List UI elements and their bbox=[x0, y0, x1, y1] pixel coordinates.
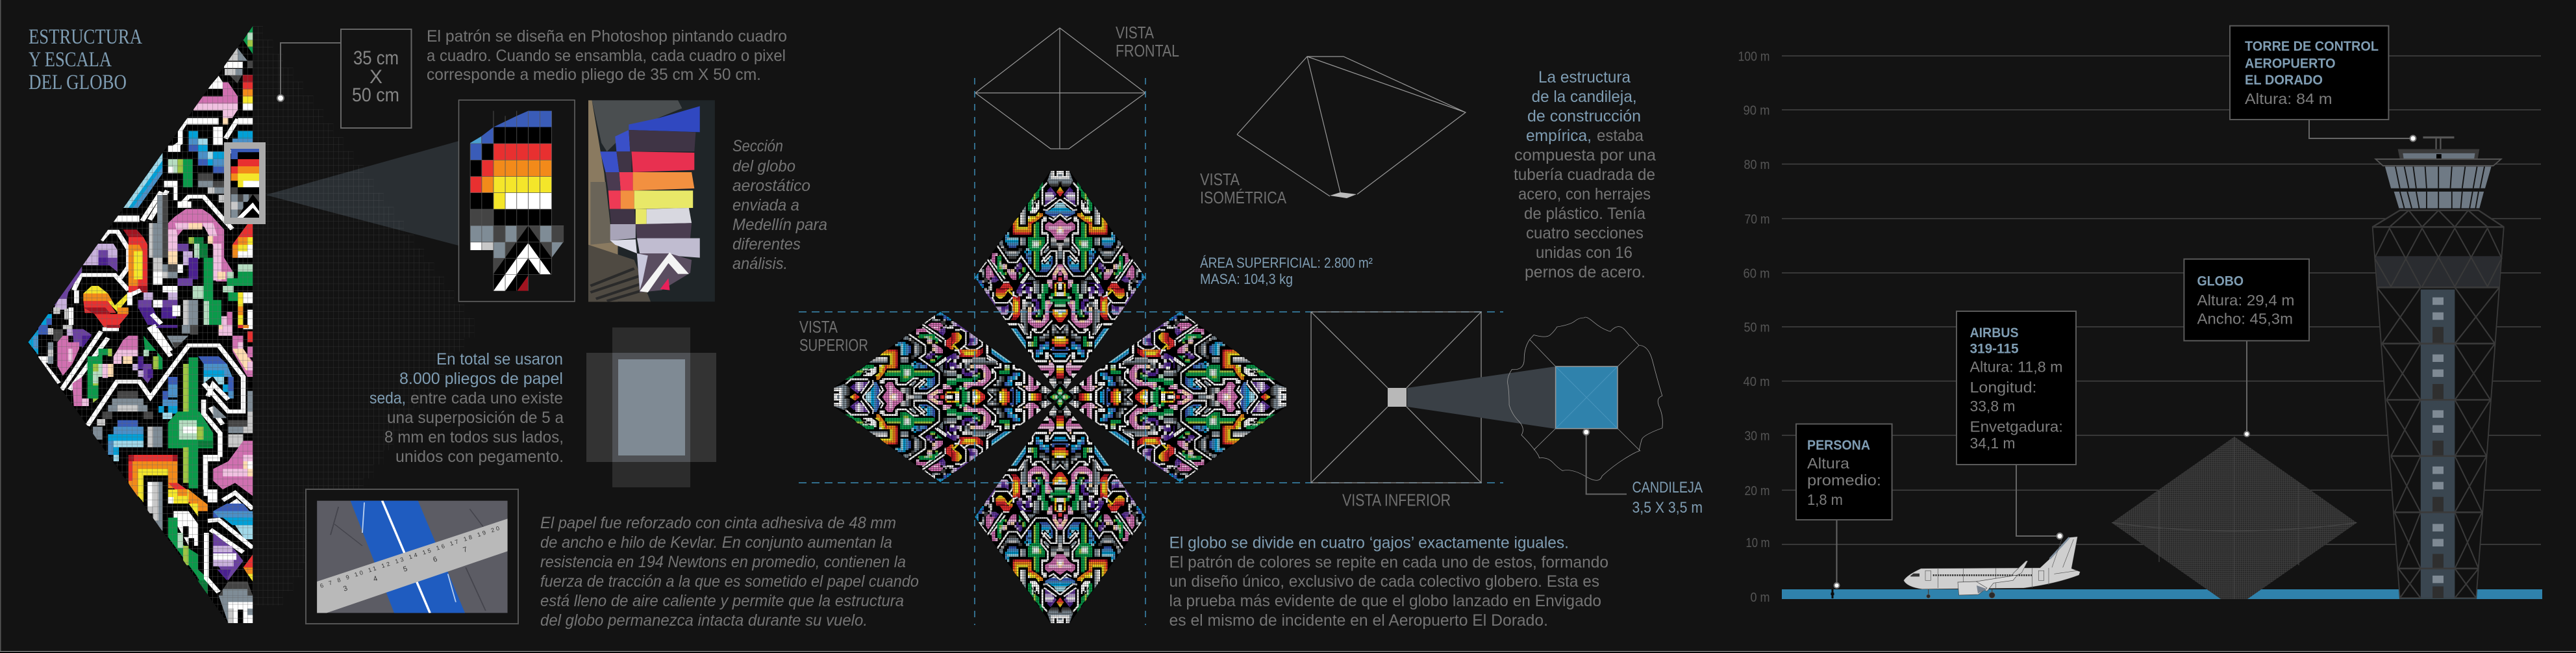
text: tape reinforcement bbox=[540, 514, 919, 630]
label: vista superior: SUPERIOR bbox=[799, 335, 868, 355]
candileja detail bbox=[1508, 317, 1662, 480]
airbus connector bbox=[2016, 465, 2062, 539]
box: airbus: Envetgadura: bbox=[1970, 418, 2063, 435]
text: candileja structure: unidas con 16 bbox=[1536, 244, 1632, 262]
box: torre de control: TORRE DE CONTROL bbox=[2245, 39, 2379, 54]
gore: left bbox=[833, 311, 1060, 483]
photo panel: tape and ruler: 3 4 5 6 7 bbox=[342, 546, 468, 593]
scale axis labels bbox=[1738, 50, 1770, 605]
title bbox=[29, 25, 142, 94]
text: tape reinforcement: está lleno de aire caliente y permite que la estructura bbox=[540, 592, 904, 610]
gore: top bbox=[974, 170, 1146, 398]
text: 8.000 sheets: 8.000 pliegos de papel bbox=[399, 370, 563, 388]
half gore mosaic, large bbox=[26, 25, 259, 626]
caption: section sent to Medellin: Medellín para bbox=[732, 216, 827, 234]
text: 8.000 sheets bbox=[369, 350, 564, 466]
text: 8.000 sheets: unidos con pegamento. bbox=[395, 448, 564, 466]
four gores top view bbox=[833, 170, 1287, 624]
diagram: paper overlap bbox=[586, 327, 716, 487]
text: 8.000 sheets: seda, bbox=[369, 389, 406, 407]
box: airbus bbox=[1957, 311, 2076, 465]
scale axis labels: 60 m bbox=[1743, 266, 1770, 281]
caption: section sent to Medellin: del globo bbox=[732, 157, 795, 175]
box: globo: GLOBO bbox=[2197, 274, 2244, 289]
caption: section sent to Medellin: enviada a bbox=[732, 196, 799, 214]
pixel grid shadow of half gore bbox=[253, 26, 474, 606]
box: airbus: Altura: 11,8 m bbox=[1970, 358, 2062, 375]
label: vista superior bbox=[799, 317, 868, 355]
stats: area and mass bbox=[1200, 255, 1373, 287]
box: torre de control bbox=[2230, 26, 2388, 120]
title: Y ESCALA bbox=[29, 48, 112, 71]
candileja connector bbox=[1583, 429, 1627, 494]
text: four equal gores: la prueba más evidente de que el globo lanzado en Envigado bbox=[1169, 592, 1601, 610]
text: 8.000 sheets: una superposición de 5 a bbox=[387, 409, 564, 427]
scale axis labels: 100 m bbox=[1738, 50, 1770, 64]
size box 35 x 50 cm bbox=[341, 29, 412, 128]
stats: area and mass: MASA: 104,3 kg bbox=[1200, 271, 1293, 287]
box: airbus: 34,1 m bbox=[1970, 435, 2016, 452]
text: 8.000 sheets: En total se usaron bbox=[436, 350, 563, 368]
text: tape reinforcement: del globo permanezca intacta durante su vuelo. bbox=[540, 611, 868, 630]
box: persona: PERSONA bbox=[1807, 438, 1870, 453]
person silhouette bbox=[1831, 589, 1834, 598]
text: candileja structure: de la candileja, bbox=[1532, 88, 1637, 106]
size box 35 x 50 cm: 35 cm bbox=[353, 47, 399, 69]
label: vista frontal: FRONTAL bbox=[1116, 41, 1179, 60]
caption: section sent to Medellin: aerostático bbox=[732, 177, 810, 195]
isometric view wireframe bbox=[1237, 57, 1466, 198]
text: candileja structure: tubería cuadrada de bbox=[1514, 166, 1655, 184]
box: airbus: 33,8 m bbox=[1970, 398, 2016, 415]
caption: section sent to Medellin bbox=[732, 137, 827, 273]
text: tape reinforcement: El papel fue reforzado con cinta adhesiva de 48 mm bbox=[540, 514, 896, 532]
text: candileja structure bbox=[1514, 68, 1656, 281]
text: tape reinforcement: de ancho e hilo de Kevlar. En conjunto aumentan la bbox=[540, 533, 892, 552]
photo panel: tape and ruler bbox=[306, 489, 518, 624]
scale axis labels: 80 m bbox=[1744, 158, 1770, 172]
text: candileja structure: compuesta por una bbox=[1514, 146, 1656, 164]
text: four equal gores: es el mismo de incidente en el Aeropuerto El Dorado. bbox=[1169, 611, 1548, 630]
text: tape reinforcement: resistencia en 194 Newtons en promedio, contienen la bbox=[540, 553, 906, 571]
text: four equal gores bbox=[1169, 534, 1608, 630]
box: airbus: Longitud: bbox=[1970, 379, 2036, 396]
label: vista inferior: VISTA INFERIOR bbox=[1342, 490, 1451, 509]
text: four equal gores: El globo se divide en cuatro ‘gajos’ exactamente iguales. bbox=[1169, 534, 1569, 552]
scale axis labels: 70 m bbox=[1744, 212, 1770, 227]
size connector bbox=[277, 43, 341, 101]
gore: bottom bbox=[974, 396, 1146, 624]
scale chart gridlines bbox=[1782, 56, 2541, 544]
highlight box on mosaic bbox=[227, 146, 262, 221]
text: candileja structure: acero, con herrajes bbox=[1518, 185, 1651, 203]
scale axis labels: 50 m bbox=[1744, 321, 1770, 335]
box: persona bbox=[1796, 424, 1892, 520]
text: pattern design: a cuadro. Cuando se ensambla, cada cuadro o pixel bbox=[427, 47, 786, 65]
caption: section sent to Medellin: Sección bbox=[732, 137, 783, 155]
ground band bbox=[1782, 589, 2542, 599]
box: globo: Altura: 29,4 m bbox=[2197, 292, 2295, 309]
label: candileja size: 3,5 X 3,5 m bbox=[1632, 499, 1703, 517]
zoom beam to candileja bbox=[1407, 366, 1556, 429]
gore: right bbox=[1060, 311, 1287, 483]
globo connector bbox=[2244, 340, 2249, 437]
stats: area and mass: ÁREA SUPERFICIAL: 2.800 m² bbox=[1200, 255, 1373, 271]
label: vista frontal: VISTA bbox=[1116, 23, 1155, 42]
box: persona: 1,8 m bbox=[1807, 491, 1843, 508]
label: vista isometrica: ISOMÉTRICA bbox=[1200, 188, 1287, 207]
blue dashed projection lines bbox=[799, 78, 1503, 625]
zoom beam to pattern section bbox=[266, 141, 458, 246]
label: vista frontal bbox=[1116, 23, 1179, 60]
scale axis labels: 90 m bbox=[1743, 104, 1770, 118]
label: vista isometrica: VISTA bbox=[1200, 170, 1240, 189]
text: candileja structure: de plástico. Tenía bbox=[1524, 205, 1645, 223]
front view wireframe bbox=[975, 28, 1145, 149]
person connector bbox=[1834, 520, 1839, 588]
caption: section sent to Medellin: diferentes bbox=[732, 235, 801, 253]
title: ESTRUCTURA bbox=[29, 25, 142, 49]
title: DEL GLOBO bbox=[29, 71, 127, 94]
scale axis labels: 20 m bbox=[1744, 484, 1770, 498]
box: persona: promedio: bbox=[1807, 472, 1881, 489]
airplane illustration bbox=[1904, 537, 2080, 598]
scale axis labels: 10 m bbox=[1745, 536, 1770, 550]
box: torre de control: Altura: 84 m bbox=[2245, 90, 2332, 107]
text: candileja structure: estaba bbox=[1597, 127, 1644, 145]
text: pattern design: corresponde a medio pliego de 35 cm X 50 cm. bbox=[427, 66, 761, 84]
text: four equal gores: El patrón de colores se repite en cada uno de estos, formando bbox=[1169, 554, 1608, 572]
scale axis labels: 40 m bbox=[1743, 375, 1770, 389]
panel: pixel section bbox=[458, 100, 575, 301]
box: globo bbox=[2184, 259, 2309, 340]
size box 35 x 50 cm: 50 cm bbox=[352, 84, 399, 106]
text: pattern design bbox=[427, 27, 787, 84]
scale axis labels: 0 m bbox=[1751, 591, 1770, 605]
box: torre de control: EL DORADO bbox=[2245, 73, 2323, 88]
photo: balloon section on ground bbox=[588, 100, 715, 301]
control tower bbox=[2373, 138, 2504, 598]
text: 8.000 sheets: 8 mm en todos sus lados, bbox=[384, 428, 564, 446]
tower connector bbox=[2309, 120, 2416, 142]
text: candileja structure: pernos de acero. bbox=[1525, 263, 1645, 281]
text: candileja structure: cuatro secciones bbox=[1526, 224, 1644, 242]
balloon silhouette bbox=[2112, 437, 2357, 599]
text: candileja structure: La estructura bbox=[1538, 68, 1631, 86]
text: 8.000 sheets: entre cada uno existe bbox=[410, 389, 563, 407]
scale axis labels: 30 m bbox=[1744, 429, 1770, 443]
text: four equal gores: un diseño único, exclusivo de cada colectivo globero. Esta es bbox=[1169, 572, 1599, 591]
box: torre de control: AEROPUERTO bbox=[2245, 56, 2336, 71]
label: candileja size: CANDILEJA bbox=[1632, 479, 1703, 496]
label: vista superior: VISTA bbox=[799, 317, 838, 337]
box: globo: Ancho: 45,3m bbox=[2197, 311, 2293, 327]
box: persona: Altura bbox=[1807, 455, 1849, 472]
label: vista isometrica bbox=[1200, 170, 1287, 207]
photo panel: tape and ruler: 6 7 8 9 10 11 12 13 14 15 16 17 18 19 20 bbox=[319, 525, 500, 589]
text: tape reinforcement: fuerza de tracción a la que es sometido el papel cuando bbox=[540, 572, 919, 591]
text: candileja structure: empírica, bbox=[1526, 127, 1592, 145]
caption: section sent to Medellin: análisis. bbox=[732, 255, 788, 273]
size box 35 x 50 cm: X bbox=[369, 66, 382, 88]
box: airbus: AIRBUS bbox=[1970, 326, 2018, 340]
bottom view wireframe bbox=[1311, 312, 1481, 483]
text: pattern design: El patrón se diseña en Photoshop pintando cuadro bbox=[427, 27, 787, 45]
box: airbus: 319-115 bbox=[1970, 342, 2019, 357]
label: candileja size bbox=[1632, 479, 1703, 517]
text: candileja structure: de construcción bbox=[1527, 107, 1641, 125]
